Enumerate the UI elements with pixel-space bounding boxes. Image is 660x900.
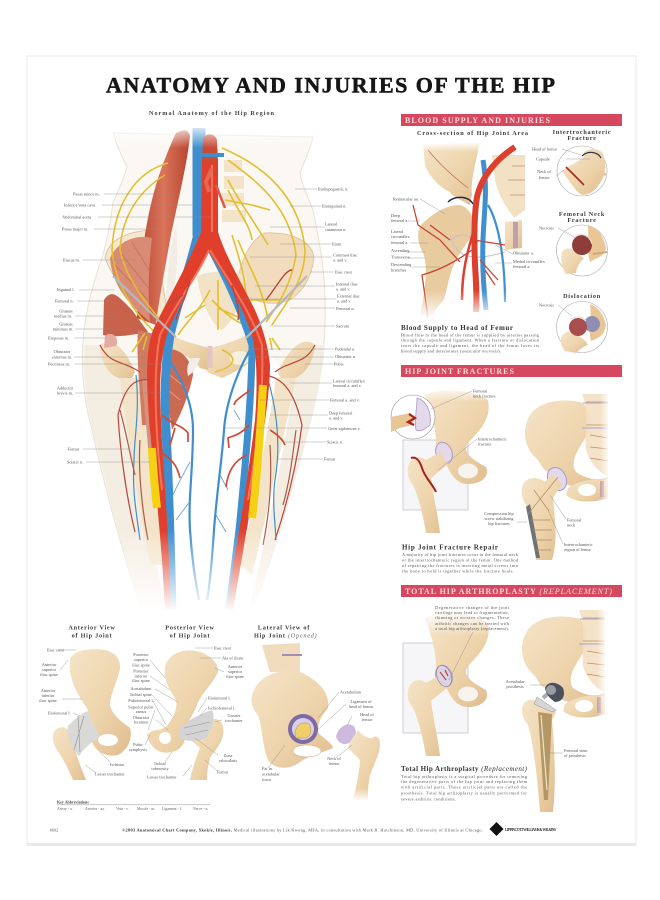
labels: posterior view: tuberosity <box>151 766 169 771</box>
labels left of main illustration: Obturator <box>54 349 71 354</box>
labels: prosthesis <box>506 679 588 758</box>
labels: cross-section: Transverse <box>391 254 410 260</box>
section banner: blood supply <box>401 114 622 126</box>
title: ANATOMY AND INJURIES OF THE HIP <box>106 72 555 98</box>
key abbreviations <box>57 800 210 811</box>
labels right of main illustration: External iliac <box>337 294 360 298</box>
labels: posterior view: Obturator <box>133 715 150 720</box>
labels: cross-section: femoral a. <box>391 240 408 245</box>
sciatic nerve <box>152 385 263 518</box>
heading: posterior view: of Hip Joint <box>170 632 210 640</box>
labels: fractures: Intertrochanteric <box>478 436 507 442</box>
labels: anterior view: Iliofemoral l. <box>48 710 71 716</box>
heading: femoral neck fracture <box>559 211 605 224</box>
labels: anterior view: Anterior <box>42 662 57 667</box>
labels: posterior view: orbicularis <box>219 758 238 763</box>
labels left of main illustration: Gluteus <box>59 308 73 314</box>
labels: posterior view: Ischial spine <box>130 692 152 697</box>
labels: anterior view <box>39 648 125 776</box>
inset: femoral neck fracture <box>556 225 608 276</box>
labels: cross-section: Obturator a. <box>513 250 534 256</box>
labels: cross-section: Lateral <box>391 229 404 234</box>
heading: intertrochanteric fracture: Fracture <box>567 135 597 142</box>
labels: anterior view: iliac spine <box>40 672 58 677</box>
labels: anterior view: inferior <box>42 693 55 698</box>
yellow nerves <box>112 148 305 372</box>
labels right of main illustration: femoral a. and v. <box>333 383 362 388</box>
text block: total hip arthroplasty: severe arthritic conditions. <box>401 796 456 802</box>
text block: hip joint fracture repair <box>402 544 519 574</box>
leader lines: lateral view <box>268 692 352 768</box>
labels left of main illustration: Pectineus m. <box>48 362 70 366</box>
key abbreviations: Arteries - aa. <box>85 807 105 811</box>
footer credit: 0602 <box>50 828 58 832</box>
labels: screw <box>484 511 593 552</box>
labels: posterior view <box>128 646 244 780</box>
labels right of main illustration: Femur <box>324 456 336 462</box>
publisher logo <box>490 822 556 836</box>
labels: posterior view: Femur <box>217 770 229 774</box>
labels: cross-section: femoral a. <box>391 218 408 223</box>
labels right of main illustration: Internal iliac <box>336 282 358 286</box>
leader lines: prosthesis <box>530 685 563 753</box>
text block: degenerative changes: a total hip arthroplasty (replacement). <box>435 626 509 631</box>
labels: posterior view: Lesser trochanter <box>147 774 177 780</box>
labels left of main illustration: medius m. <box>54 314 72 318</box>
labels: anterior view: Lesser trochanter <box>95 772 125 776</box>
labels right of main illustration: a. and v. <box>337 298 351 304</box>
leader lines: posterior view <box>145 648 224 776</box>
labels: posterior view: trochanter <box>225 718 243 723</box>
labels: fractures <box>473 388 507 446</box>
labels left of main illustration: externus m. <box>52 354 72 360</box>
leader line: degenerative changes <box>449 632 473 680</box>
text block: total hip arthroplasty: with artificial parts. These artificial parts are called the <box>401 784 527 790</box>
labels right of main illustration: Common iliac <box>333 252 358 258</box>
labels right of main illustration: Pudendal n. <box>335 346 355 352</box>
labels: fractures: fracture <box>478 442 491 446</box>
labels: posterior view: Ischiofemoral l. <box>208 706 235 710</box>
labels: posterior view: Anterior <box>228 664 243 669</box>
text block: hip joint fracture repair: or the intertrochanteric region of the femur. One method <box>402 558 519 562</box>
muscles <box>103 130 200 470</box>
labels: posterior view: iliac spine <box>132 662 150 668</box>
labels: cross-section: Medial circumflex <box>513 259 546 264</box>
inguinal ligaments <box>113 276 307 338</box>
leader lines: main illustration <box>74 189 336 462</box>
labels left of main illustration: Psoas minor m. <box>73 192 100 196</box>
labels left of main illustration: minimus m. <box>53 326 73 332</box>
labels: posterior view: superior <box>134 657 149 662</box>
labels: prosthesis: Femoral stem <box>564 748 588 753</box>
text block: degenerative changes: cartilage may lead to fragmentation, <box>435 610 509 616</box>
labels: cross-section: Deep <box>391 213 400 218</box>
key abbreviations: Muscle - m. <box>137 807 155 811</box>
labels right of main illustration: Iliac crest <box>335 270 353 274</box>
heading: dislocation: Dislocation <box>563 293 601 300</box>
labels: prosthesis: Acetabular <box>506 679 525 684</box>
labels: posterior view: Pubic <box>133 742 143 747</box>
labels: posterior view: Iliofemoral l. <box>208 696 231 700</box>
labels: prosthesis: prosthesis <box>506 684 524 689</box>
text block: blood supply to head of femur: through the capsule and ligament. When a fracture or dislocation <box>401 338 540 342</box>
labels left of main illustration: Adductor <box>57 386 74 390</box>
key abbreviations: Vein - v. <box>116 807 129 811</box>
text block: degenerative changes <box>435 605 510 631</box>
labels right of main illustration: Deep femoral <box>329 410 353 416</box>
label: necrosis femoral neck <box>539 226 576 238</box>
text block: blood supply to head of femur: blood supply and deteriorates (avascular necrosis). <box>401 348 501 354</box>
text block: blood supply to head of femur: tears the capsule and ligament, the head of the femur loses its <box>401 343 539 349</box>
labels right of main illustration <box>318 186 366 462</box>
key abbreviations: Artery - a. <box>57 807 73 811</box>
labels: lateral view: Neck of <box>327 756 341 761</box>
text block: total hip arthroplasty <box>401 765 528 802</box>
section banner: total hip arthroplasty: TOTAL HIP ARTHROPLASTY (REPLACEMENT) <box>405 587 613 596</box>
label: necrosis dislocation <box>539 302 572 316</box>
labels: cross-section: branches <box>391 268 407 272</box>
key abbreviations: Key Abbreviations <box>57 800 89 804</box>
heading: lateral view: Hip Joint (Opened) <box>254 632 317 640</box>
labels: lateral view: Head of <box>360 712 374 717</box>
footer credit: ©2003 Anatomical Chart Company, Skokie, Illinois. Medical illustrations by Lik Kwong, MFA, in consultation with Mark R. Hutchinson, MD, University of Illinois at Chicago. <box>122 828 483 834</box>
inset: intertrochanteric fracture <box>557 146 607 196</box>
labels: screw: region of femur <box>564 547 592 552</box>
heading: intertrochanteric fracture: Intertrochanteric <box>553 129 611 136</box>
labels right of main illustration: Pubis <box>334 362 344 366</box>
publisher logo: LIPPINCOTT WILLIAMS & WILKINS <box>505 828 556 832</box>
labels right of main illustration: Iliohypogastric n. <box>318 186 348 192</box>
labels: screw: hip fractures <box>488 521 510 526</box>
labels: posterior view: inferior <box>135 674 148 678</box>
body silhouette <box>82 133 325 605</box>
labels: anterior view: Ischium <box>110 762 125 767</box>
text block: degenerative changes: Degenerative changes of the joint <box>435 605 510 610</box>
heading: anterior view: of Hip Joint <box>72 632 112 640</box>
labels left of main illustration: Inferior vena cava <box>64 202 95 208</box>
labels left of main illustration: Psoas major m. <box>62 226 88 232</box>
labels left of main illustration: Iliacus m. <box>63 258 80 262</box>
text block: total hip arthroplasty: Total hip arthroplasty is a surgical procedure for removing <box>401 774 528 779</box>
labels: posterior view: Posterior <box>133 652 149 657</box>
illustration: arthritic hip joint <box>403 610 495 756</box>
label: necrosis dislocation: Necrosis <box>539 302 554 308</box>
labels left of main illustration: Gluteus <box>59 322 73 326</box>
labels: lateral view: femur <box>329 761 340 766</box>
labels: intertrochanteric inset: Capsule <box>536 156 550 162</box>
labels: cross-section: Ascending <box>391 248 410 253</box>
labels: screw: neck <box>567 522 576 528</box>
labels: posterior view: Posterior <box>133 668 149 674</box>
labels: screw: Compression hip <box>484 511 514 516</box>
labels: lateral view: acetabular <box>262 772 280 776</box>
labels left of main illustration: Abdominal aorta <box>62 214 91 220</box>
labels right of main illustration: a. and v. <box>333 258 347 262</box>
labels: lateral view: fossa <box>262 777 271 782</box>
labels: intertrochanteric inset: Head of femur <box>532 146 558 152</box>
bottom and top fade <box>80 530 350 612</box>
text block: total hip arthroplasty: prosthesis. Total hip arthroplasty is usually performed for <box>401 790 528 796</box>
key abbreviations: Nerve - n. <box>193 807 208 811</box>
heading: femoral neck fracture: Femoral Neck <box>559 211 605 218</box>
footer credit <box>50 828 483 834</box>
heading: posterior view: Posterior View <box>165 624 215 632</box>
labels: intertrochanteric inset <box>532 146 590 180</box>
labels: posterior view: symphysis <box>129 747 147 752</box>
heading: anterior view: Anterior View <box>68 624 116 632</box>
text block: total hip arthroplasty: Total Hip Arthroplasty (Replacement) <box>401 765 528 773</box>
labels: posterior view: Pubofemoral l. <box>128 698 154 703</box>
text block: hip joint fracture repair: of repairing the fractures is inserting metal screws into <box>402 563 518 568</box>
labels: posterior view: Superior pubic <box>128 704 154 710</box>
labels: fractures: Femoral <box>473 388 488 394</box>
labels: screw: Intertrochanteric <box>564 542 593 547</box>
labels: posterior view: Greater <box>228 713 241 718</box>
labels left of main illustration: Iliopsoas m. <box>48 336 69 340</box>
bones of the pelvis <box>100 160 315 575</box>
labels: posterior view: Zona <box>224 753 232 758</box>
labels: intertrochanteric inset: Neck of <box>537 169 551 174</box>
red aorta, iliac and femoral arteries <box>147 134 270 610</box>
labels right of main illustration: cutaneous n. <box>325 227 346 232</box>
labels: lateral view: Fat in <box>262 766 273 771</box>
labels: lateral view: femur <box>362 717 373 722</box>
illustration: hip with compression screw <box>522 390 610 560</box>
heading: intertrochanteric fracture <box>553 129 611 142</box>
labels right of main illustration: Ilioinguinal n. <box>322 204 346 208</box>
labels: fractures: neck fracture <box>473 394 496 398</box>
labels: posterior view: superior <box>228 669 243 674</box>
illustration: hip joint with fractures <box>391 386 495 533</box>
labels: cross-section: circumflex <box>391 234 410 239</box>
labels: cross-section: Descending <box>391 262 412 267</box>
labels: posterior view: foramen <box>134 720 149 724</box>
labels: lateral view <box>262 690 374 782</box>
heading: anterior view <box>68 624 116 640</box>
labels: posterior view: Iliac crest <box>214 646 232 650</box>
labels right of main illustration: Femoral n. <box>336 306 355 311</box>
labels left of main illustration: Femoral n. <box>55 298 74 304</box>
text block: blood supply to head of femur: Blood Supply to Head of Femur <box>401 324 513 332</box>
labels: anterior view: Anterior <box>41 688 56 693</box>
illustration: lateral view of hip joint <box>251 643 380 801</box>
text block: hip joint fracture repair: Hip Joint Fracture Repair <box>402 544 498 552</box>
inset: dislocation <box>556 302 608 353</box>
leader lines: cross-section <box>408 199 513 267</box>
section banner: hip joint fractures <box>401 365 622 377</box>
heading: normal anatomy: Normal Anatomy of the Hip Region <box>149 110 275 117</box>
label: necrosis femoral neck: Necrosis <box>539 226 554 230</box>
heading: cross-section: Cross-section of Hip Joint Area <box>417 130 528 137</box>
labels: posterior view: Acetabulum <box>130 686 152 691</box>
leader lines: anterior view <box>58 650 110 773</box>
illustration: anterior view of hip joint <box>53 649 131 780</box>
labels: cross-section: femoral a. <box>513 264 530 269</box>
labels right of main illustration: Lateral circumflex <box>333 378 366 384</box>
labels: anterior view: iliac spine <box>39 698 57 703</box>
labels: prosthesis: of prosthesis <box>564 753 586 758</box>
labels: posterior view: iliac spine <box>226 674 244 679</box>
labels left of main illustration: Sciatic n. <box>67 460 83 464</box>
labels right of main illustration: Femoral a. and v. <box>330 398 360 402</box>
labels: posterior view: Ala of ilium <box>222 656 244 660</box>
text block: degenerative changes: thinning or erosive changes. These <box>435 615 509 620</box>
section banner: hip joint fractures: HIP JOINT FRACTURES <box>405 367 515 376</box>
heading: femoral neck fracture: Fracture <box>567 217 597 224</box>
section banner: blood supply: BLOOD SUPPLY AND INJURIES <box>405 116 551 125</box>
illustration: cross-section of hip joint area <box>413 142 535 320</box>
main illustration: normal anatomy of the hip region <box>80 122 350 612</box>
branch arteries <box>100 270 315 545</box>
text block: hip joint fracture repair: A majority of hip joint fractures occur in the femoral neck <box>402 552 519 557</box>
labels right of main illustration: Great saphenous v. <box>328 426 361 431</box>
labels: cross-section: Retinacular aa. <box>393 196 419 202</box>
heading: posterior view <box>165 624 215 640</box>
text block: hip joint fracture repair: the bone to hold it together while the fracture heals. <box>402 568 514 574</box>
labels left of main illustration: Femur <box>68 446 80 452</box>
labels: lateral view: head of femur <box>349 704 374 709</box>
labels right of main illustration: Obturator n. <box>335 354 356 359</box>
labels: anterior view: superior <box>42 667 57 672</box>
labels: posterior view: Ischial <box>154 761 167 766</box>
leader lines: fractures <box>431 391 477 470</box>
labels: cross-section <box>391 196 546 272</box>
labels: anterior view: Iliac crest <box>47 648 65 652</box>
labels left of main illustration: Inguinal l. <box>57 287 75 292</box>
illustration: hip with prosthesis <box>522 606 607 812</box>
labels right of main illustration: Sacrum <box>336 324 350 328</box>
labels: intertrochanteric inset: femur <box>539 175 550 180</box>
labels: screw: screw stabilizing <box>484 516 514 521</box>
labels: posterior view: ramus <box>136 709 147 714</box>
labels right of main illustration: a. and v. <box>329 416 343 420</box>
key abbreviations: Ligament - l. <box>162 807 182 811</box>
labels: lateral view: Acetabulum <box>340 690 362 694</box>
labels right of main illustration: Lateral <box>325 222 338 226</box>
labels left of main illustration <box>48 192 100 464</box>
labels right of main illustration: a. and v. <box>336 286 350 292</box>
text block: total hip arthroplasty: the degenerative parts of the hip joint and replacing them <box>401 779 528 784</box>
leader lines: screw <box>517 495 566 544</box>
text block: degenerative changes: arthritic changes can be treated with <box>435 621 510 626</box>
blue veins <box>133 128 278 610</box>
labels: lateral view: Ligament of <box>350 699 372 704</box>
illustration: posterior view of hip joint <box>147 651 223 780</box>
heading: lateral view: Lateral View of <box>258 624 310 632</box>
labels: posterior view: iliac spine <box>132 678 150 683</box>
heading: lateral view <box>254 624 317 640</box>
text block: blood supply to head of femur: Blood flow to the head of the femur is supplied by arteries passing <box>401 332 540 338</box>
labels left of main illustration: brevis m. <box>57 390 73 396</box>
labels right of main illustration: Ilium <box>332 242 342 246</box>
labels right of main illustration: Sciatic n. <box>327 440 343 444</box>
text block: blood supply to head of femur <box>401 324 540 354</box>
labels: screw: Femoral <box>567 518 582 522</box>
